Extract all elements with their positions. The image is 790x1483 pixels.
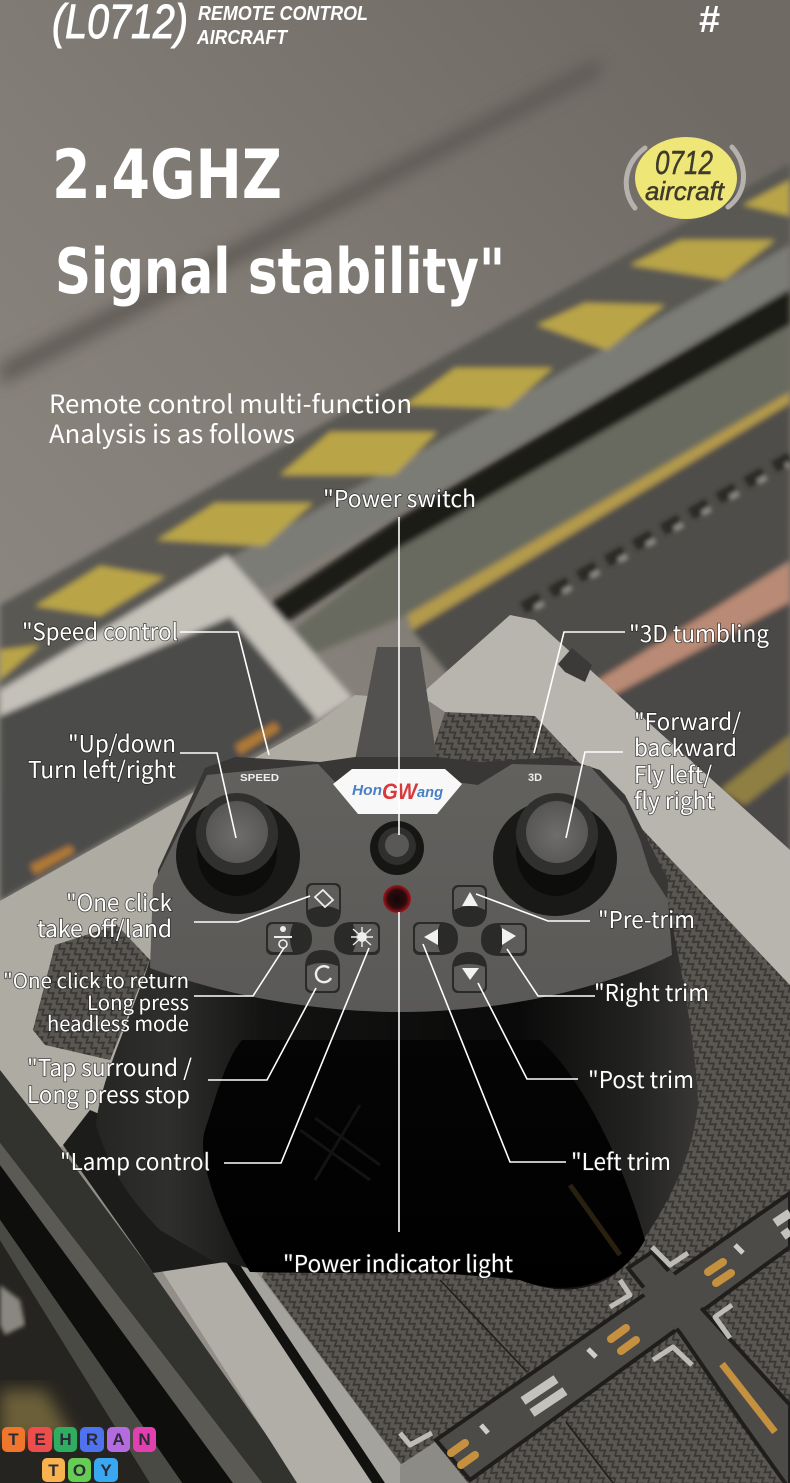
badge: 0712 aircraft <box>626 137 744 219</box>
callout: 3D tumbling: "3D tumbling <box>629 615 769 649</box>
SPEED label: SPEED <box>240 773 279 784</box>
callout: speed control <box>22 613 269 755</box>
return button <box>266 922 312 955</box>
callout: one click to return: Long press <box>87 987 189 1016</box>
power switch <box>370 821 424 875</box>
callout: left trim <box>423 944 671 1177</box>
intro text <box>49 385 412 451</box>
left button cluster <box>266 883 380 993</box>
watermark: Tehran Toy: O <box>73 1461 86 1480</box>
callout: up/down: "Up/down <box>68 725 176 759</box>
antenna <box>355 647 437 760</box>
faint cross mark on panel <box>300 1105 620 1255</box>
callout: power indicator light: "Power indicator light <box>283 1245 513 1279</box>
logo plate: ang <box>417 784 443 801</box>
watermark: Tehran Toy: Y <box>100 1461 112 1480</box>
product line 2: AIRCRAFT <box>196 27 289 49</box>
watermark: Tehran Toy: N <box>138 1430 151 1449</box>
controller underside <box>96 890 698 1289</box>
title <box>52 136 505 308</box>
callout: one click to return: "One click to return <box>3 965 189 994</box>
logo plate: GW <box>382 779 419 804</box>
up button <box>452 885 487 927</box>
watermark: Tehran Toy <box>2 1427 156 1482</box>
callout: forward/backward: backward <box>634 729 737 763</box>
controller <box>96 647 698 1289</box>
badge: 0712 aircraft: 0712 <box>655 144 713 181</box>
callout: one click to return <box>3 948 284 1037</box>
down button <box>452 952 487 993</box>
circle button <box>305 950 340 993</box>
textured panel seams <box>440 1280 613 1483</box>
callout: forward/backward: Fly left/ <box>634 756 712 790</box>
top shell <box>155 757 668 1012</box>
title: Signal stability" <box>55 235 505 308</box>
3D label: 3D <box>528 772 542 784</box>
callout: tap surround: "Tap surround / <box>27 1049 192 1083</box>
hash mark: # <box>699 0 720 41</box>
callout: one click take off: take off/land <box>37 910 172 944</box>
right button <box>481 923 527 956</box>
conveyor rollers <box>523 458 790 608</box>
callout: up/down <box>28 725 236 838</box>
track cross <box>400 1193 790 1483</box>
callout: 3D tumbling <box>534 615 769 753</box>
black lower panel <box>203 1040 645 1288</box>
lamp button <box>334 922 380 955</box>
product line 1: REMOTE CONTROL <box>198 3 368 25</box>
left joystick <box>176 793 300 914</box>
callout: right trim: "Right trim <box>594 974 709 1008</box>
take off button <box>306 883 341 927</box>
header product name <box>52 0 368 49</box>
callout: forward/backward: "Forward/ <box>634 703 741 737</box>
watermark: Tehran Toy: E <box>34 1430 46 1449</box>
callout: post trim: "Post trim <box>588 1061 694 1095</box>
left button <box>413 922 458 955</box>
callout: pre-trim <box>476 894 695 935</box>
watermark: Tehran Toy: T <box>48 1461 59 1480</box>
right button cluster <box>413 885 527 993</box>
intro text: Remote control multi-function <box>49 385 412 421</box>
callout: tap surround: Long press stop <box>27 1076 190 1110</box>
callout: forward/backward: fly right <box>634 782 715 816</box>
face plate <box>150 764 672 1012</box>
intro text: Analysis is as follows <box>49 415 295 451</box>
controller cast shadow <box>63 1110 300 1273</box>
watermark: Tehran Toy: T <box>8 1430 19 1449</box>
callout: power switch: "Power switch <box>323 480 476 514</box>
callout: one click take off: "One click <box>66 884 172 918</box>
callout: tap surround <box>27 988 316 1110</box>
lower left bands <box>0 1070 300 1483</box>
power indicator <box>383 885 411 913</box>
callout: left trim: "Left trim <box>571 1143 671 1177</box>
watermark: Tehran Toy: R <box>86 1430 98 1449</box>
watermark: Tehran Toy: A <box>112 1430 125 1449</box>
watermark: Tehran Toy: H <box>59 1430 72 1449</box>
title: 2.4GHZ <box>52 136 282 215</box>
callout: one click to return: headless mode <box>47 1008 189 1037</box>
callout: forward/backward <box>566 703 741 838</box>
callout: speed control: "Speed control <box>22 613 178 647</box>
badge: 0712 aircraft: aircraft <box>645 176 726 206</box>
logo plate <box>333 769 462 814</box>
callout: up/down: Turn left/right <box>28 751 176 785</box>
callout: right trim <box>507 949 709 1008</box>
callout: pre-trim: "Pre-trim <box>598 901 695 935</box>
callout: lamp control: "Lamp control <box>60 1143 210 1177</box>
right joystick <box>493 793 617 916</box>
callout: lamp control <box>60 948 369 1177</box>
callout: post trim <box>478 983 694 1095</box>
callout: one click take off <box>37 884 310 944</box>
logo plate: Hon <box>352 782 382 799</box>
concrete under controller <box>0 695 430 1147</box>
